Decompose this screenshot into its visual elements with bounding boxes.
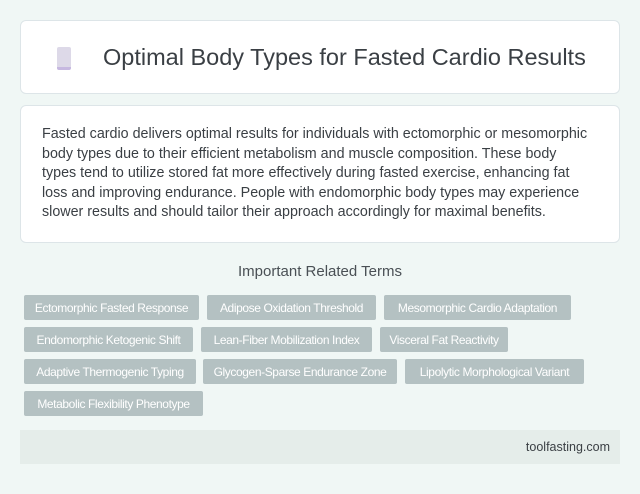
description text: loss and improving endurance. People with endomorphic body types may experience <box>42 184 579 200</box>
tag: Adipose Oxidation Threshold <box>220 301 363 315</box>
description card <box>20 105 620 243</box>
tag <box>405 359 584 384</box>
tag: Endomorphic Ketogenic Shift <box>37 333 180 347</box>
tag <box>24 359 196 384</box>
tag <box>201 327 372 352</box>
tag <box>203 359 397 384</box>
description text: Fasted cardio delivers optimal results for individuals with ectomorphic or mesomorphic <box>42 126 587 142</box>
description text: slower results and should tailor their approach accordingly for maximal benefits. <box>42 204 546 220</box>
tag <box>24 295 199 320</box>
tag <box>24 327 193 352</box>
title card <box>20 20 620 94</box>
tag: Lipolytic Morphological Variant <box>420 365 569 379</box>
tag: Visceral Fat Reactivity <box>389 333 499 347</box>
tag: Adaptive Thermogenic Typing <box>36 365 184 379</box>
tag <box>24 391 203 416</box>
tag <box>207 295 376 320</box>
footer text: toolfasting.com <box>526 440 610 454</box>
description text <box>42 126 587 220</box>
tag: Mesomorphic Cardio Adaptation <box>398 301 557 315</box>
heading: related terms: Important Related Terms <box>238 263 402 280</box>
footer <box>20 430 620 464</box>
tag: Lean-Fiber Mobilization Index <box>214 333 359 347</box>
description text: types tend to utilize stored fat more effectively during fasted exercise, enhancing fat <box>42 165 569 181</box>
tag: Metabolic Flexibility Phenotype <box>37 397 190 411</box>
description text: body types due to their efficient metabolism and muscle composition. These body <box>42 146 556 162</box>
title: Optimal Body Types for Fasted Cardio Results <box>103 44 586 70</box>
tag: Ectomorphic Fasted Response <box>35 301 188 315</box>
tag <box>380 327 508 352</box>
tag <box>384 295 571 320</box>
tag: Glycogen-Sparse Endurance Zone <box>214 365 386 379</box>
icon: scroll <box>57 47 71 70</box>
